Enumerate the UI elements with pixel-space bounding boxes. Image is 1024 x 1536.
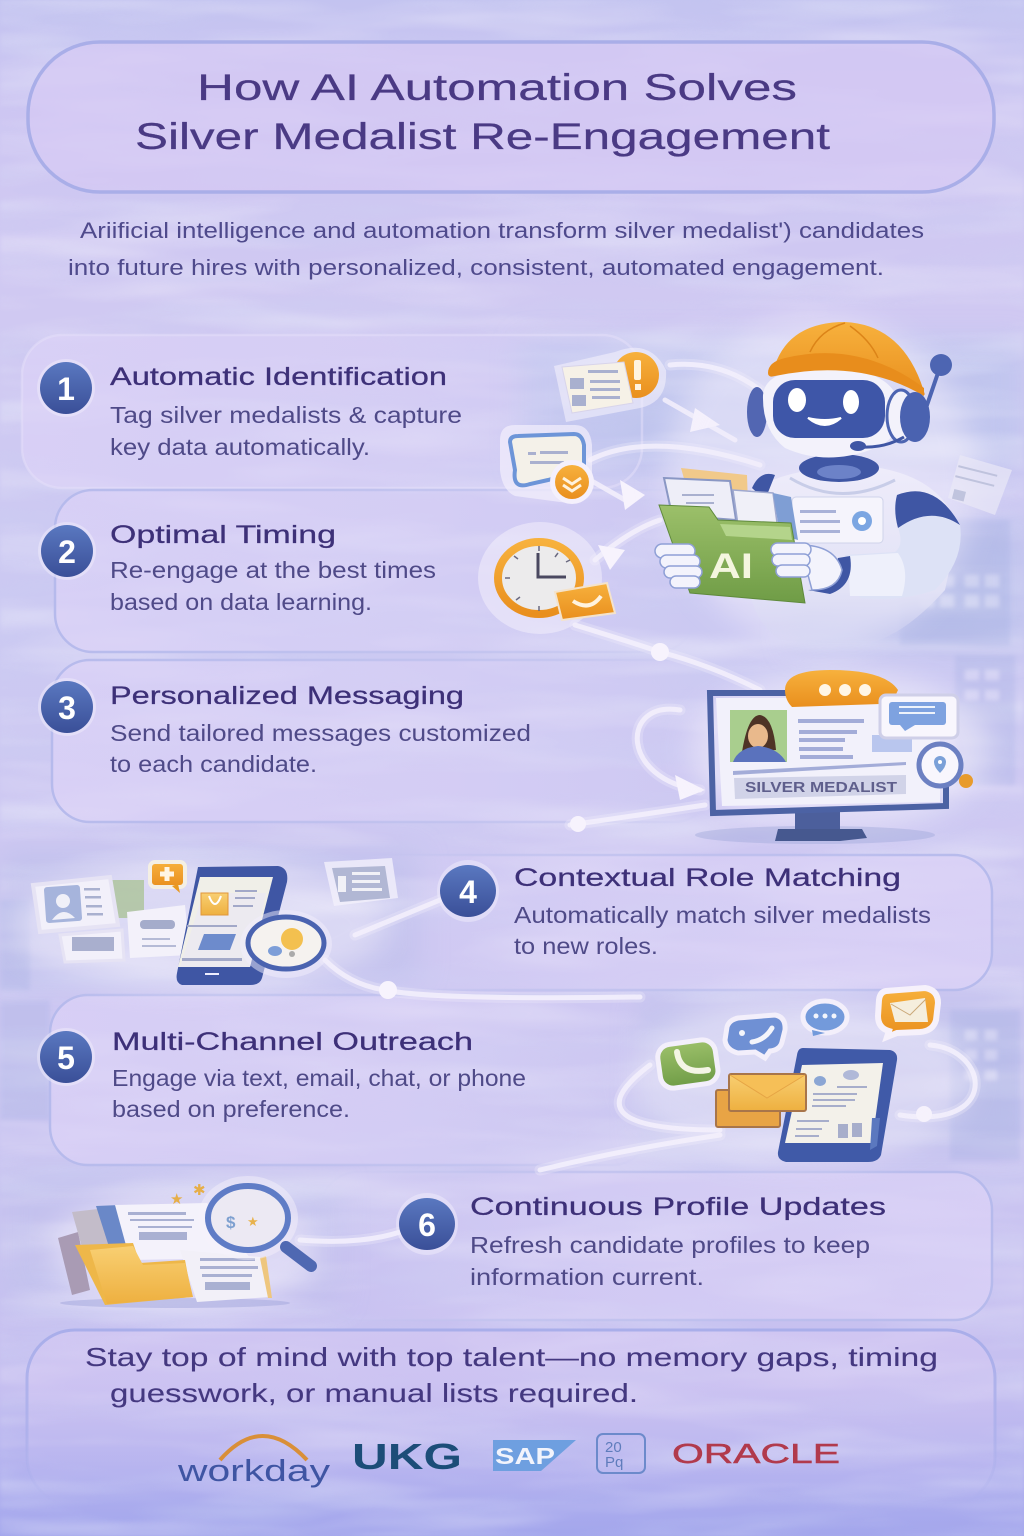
badge 3 <box>38 678 96 736</box>
helmet <box>775 322 925 395</box>
illustration: monitor with candidate profile <box>690 670 990 844</box>
step 5 <box>37 1028 526 1122</box>
robot left hand <box>655 544 702 588</box>
logo: square mark <box>597 1434 645 1473</box>
magnifier <box>240 910 332 978</box>
illustration: multi-channel phone and bubbles <box>630 988 970 1165</box>
magnifier: $ <box>226 1213 236 1232</box>
body 3: Send tailored messages customized <box>110 720 531 746</box>
step 2 <box>38 521 436 615</box>
stars <box>170 1182 206 1208</box>
body 2: based on data learning. <box>110 589 372 615</box>
chat bubble <box>803 1001 847 1036</box>
logo: SAP <box>493 1440 576 1471</box>
body 4: Automatically match silver medalists <box>514 902 931 928</box>
robot body <box>745 467 958 645</box>
icon: clock with phone badge <box>478 522 615 634</box>
logo: workday <box>177 1436 331 1488</box>
logo: square mark: 20 <box>605 1439 622 1456</box>
heading 6: Continuous Profile Updates <box>470 1193 886 1221</box>
body 5: Engage via text, email, chat, or phone <box>112 1065 526 1091</box>
phone <box>177 866 287 985</box>
folder papers <box>664 468 798 540</box>
closing text <box>85 1342 938 1408</box>
silver medalist tag <box>734 775 906 799</box>
logo: SAP: SAP <box>495 1443 555 1469</box>
body 3: to each candidate. <box>110 751 317 777</box>
yellow folder <box>75 1243 193 1305</box>
illustration: robot holding AI folder <box>655 315 975 645</box>
connector paths <box>300 364 975 1241</box>
closing text: guesswork, or manual lists required. <box>110 1378 638 1408</box>
magnifier: ★ <box>247 1214 259 1229</box>
heading 2: Optimal Timing <box>110 521 336 549</box>
magnifier <box>198 1176 311 1266</box>
body 2 <box>110 557 436 615</box>
badge 1: 1 <box>57 371 75 407</box>
badge 2: 2 <box>58 534 76 570</box>
badge 4 <box>437 860 499 922</box>
body 5 <box>112 1065 526 1122</box>
step 1 <box>37 359 462 460</box>
logo: square mark: Pq <box>605 1454 623 1471</box>
badge 6: 6 <box>418 1207 436 1243</box>
logo: Oracle: ORACLE <box>672 1438 840 1469</box>
body 4 <box>514 902 931 959</box>
logo: workday: workday <box>177 1453 331 1488</box>
closing panel <box>27 1330 995 1505</box>
magnifier with pin <box>919 744 973 788</box>
intro text: Ariificial intelligence and automation transform silver medalist') candidates <box>80 218 924 243</box>
intro text: into future hires with personalized, consistent, automated engagement. <box>68 255 884 280</box>
badge 5 <box>37 1028 95 1086</box>
profile card <box>33 877 190 962</box>
step 4 <box>437 860 931 959</box>
badge 4: 4 <box>459 874 477 910</box>
orange mail bubble <box>878 988 938 1037</box>
heading 4: Contextual Role Matching <box>514 864 901 892</box>
envelopes <box>716 1074 806 1127</box>
robot right arm <box>808 491 961 599</box>
title: How AI Automation Solves <box>197 67 797 108</box>
intro text <box>68 218 924 280</box>
step panel outlines <box>22 335 992 1320</box>
orange typing bubble <box>785 670 898 707</box>
body 1 <box>110 402 462 460</box>
green phone bubble <box>656 1038 720 1090</box>
stars: ★ <box>170 1191 183 1208</box>
stars: ✱ <box>193 1182 206 1199</box>
plus bubble <box>150 862 185 893</box>
icon: floating document <box>948 455 1012 515</box>
icon: alert document <box>554 348 666 422</box>
badge 5: 5 <box>57 1040 75 1076</box>
icon: chat document with badge <box>500 425 594 504</box>
green AI folder <box>659 505 805 603</box>
robot neck <box>799 454 879 482</box>
body 5: based on preference. <box>112 1096 350 1122</box>
illustration: phone with profile cards <box>10 858 398 990</box>
heading 5: Multi-Channel Outreach <box>112 1028 473 1056</box>
documents <box>115 1203 272 1302</box>
title panel <box>28 42 994 192</box>
title: Silver Medalist Re-Engagement <box>135 116 831 157</box>
step 6 <box>396 1193 886 1290</box>
logo: UKG: UKG <box>352 1436 462 1477</box>
tablet phone <box>778 1048 897 1162</box>
body 6 <box>470 1232 870 1290</box>
silver medalist tag: SILVER MEDALIST <box>745 779 897 796</box>
body 6: Refresh candidate profiles to keep <box>470 1232 870 1258</box>
green AI folder: AI <box>709 547 753 586</box>
body 1: key data automatically. <box>110 434 370 460</box>
body 2: Re-engage at the best times <box>110 557 436 583</box>
small list card <box>324 858 398 906</box>
badge 6 <box>396 1193 458 1255</box>
step 3 <box>38 678 531 777</box>
illustration: folder with magnifier <box>50 1176 320 1312</box>
heading 1: Automatic Identification <box>110 363 447 391</box>
candidate photo <box>730 710 787 762</box>
badge 3: 3 <box>58 690 76 726</box>
closing text: Stay top of mind with top talent—no memory gaps, timing <box>85 1342 938 1372</box>
heading 3: Personalized Messaging <box>110 682 464 710</box>
body 4: to new roles. <box>514 933 658 959</box>
blue call bubble <box>725 1015 785 1058</box>
body 3 <box>110 720 531 777</box>
robot right hand <box>771 543 842 590</box>
robot head <box>747 322 952 458</box>
body 6: information current. <box>470 1264 704 1290</box>
blue chat bubble <box>880 695 958 738</box>
badge 2 <box>38 522 96 580</box>
badge 1 <box>37 359 95 417</box>
body 1: Tag silver medalists & capture <box>110 402 462 428</box>
title <box>135 67 831 157</box>
